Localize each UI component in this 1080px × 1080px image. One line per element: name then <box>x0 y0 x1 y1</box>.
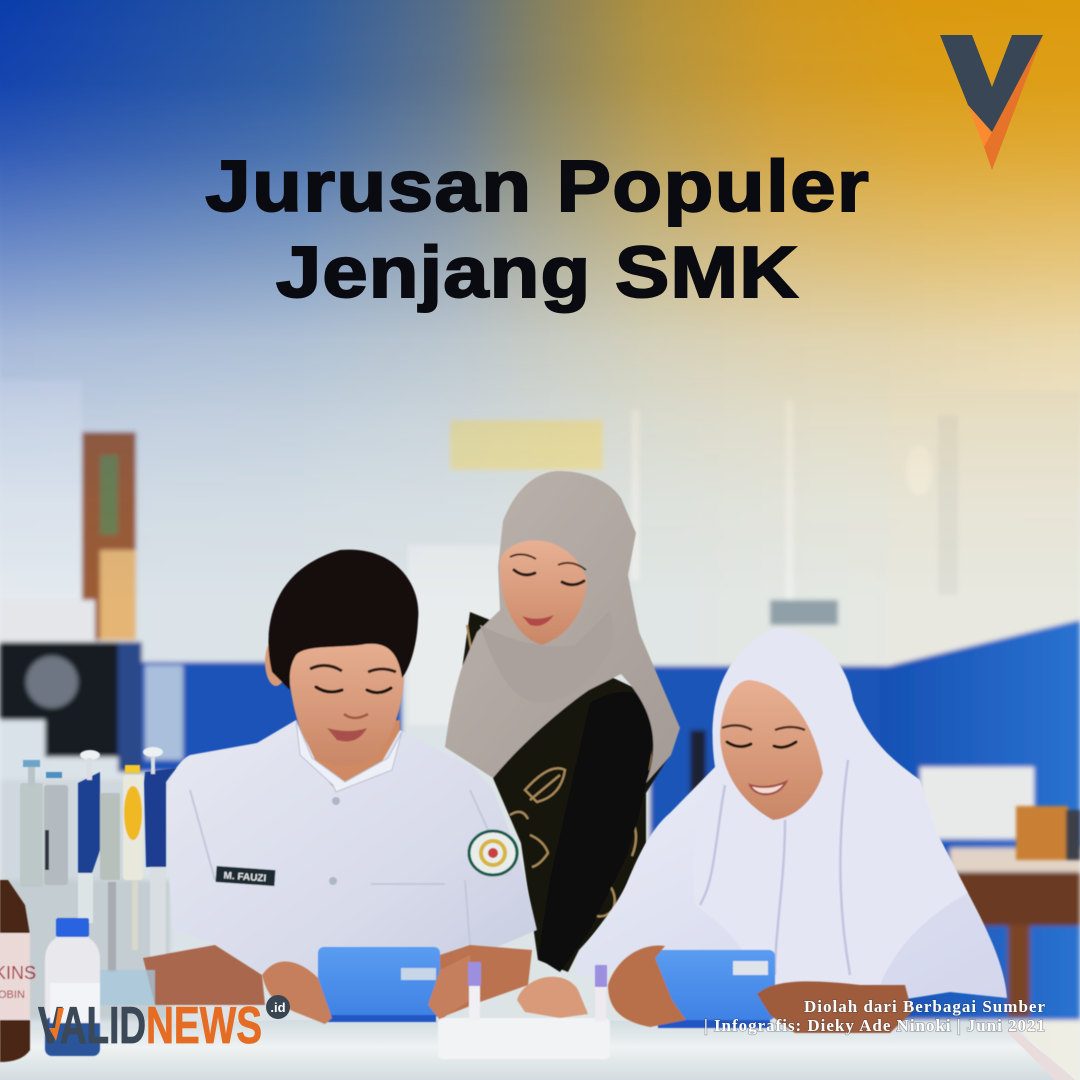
brown forearm behind rack <box>143 945 265 1005</box>
name tag: M. FAUZI <box>223 871 267 884</box>
school badge <box>469 831 517 875</box>
female student right hand <box>757 981 912 1033</box>
girl eyes <box>727 742 796 747</box>
top gradient overlay <box>0 0 1080 538</box>
teacher with grey hijab <box>445 471 680 972</box>
blue tablets, hands and test tubes <box>262 945 912 1059</box>
white test tube rack <box>438 1018 610 1059</box>
source credit: Diolah dari Berbagai Sumber <box>804 997 1045 1016</box>
logo .id badge <box>266 995 290 1019</box>
bottle label <box>0 933 36 1020</box>
source credit <box>704 997 1045 1035</box>
white reagent bottle <box>45 918 100 1056</box>
girl face <box>720 680 823 820</box>
orange box on desk <box>1016 806 1080 860</box>
male student left hand <box>262 962 332 1024</box>
source credit: | Infografis: Dieky Ade Ninoki | Juni 2021 <box>704 1016 1045 1035</box>
teacher eyes <box>514 570 584 585</box>
title <box>205 146 869 313</box>
name tag <box>216 866 275 886</box>
title: Jenjang SMK <box>276 232 798 313</box>
teacher mouth <box>522 615 554 626</box>
title: Jurusan Populer <box>205 146 869 227</box>
student face <box>288 635 404 766</box>
female student blue tablet <box>653 950 775 1028</box>
left bench glassware and pipette rack <box>0 747 265 1062</box>
pipette: blue <box>78 750 100 923</box>
girl brows <box>722 725 805 730</box>
hijab folds <box>700 760 850 975</box>
male student blue tablet <box>318 947 440 1022</box>
shirt folds <box>190 790 497 945</box>
girl smile <box>750 782 786 794</box>
student eyes <box>316 687 391 693</box>
pipette: yellow <box>123 765 143 950</box>
teacher brows <box>510 554 586 570</box>
brown reagent bottle <box>0 880 30 1062</box>
test tube left <box>468 962 481 1020</box>
pipette: navy <box>143 747 176 970</box>
Validnews logo: NEWS <box>146 997 262 1055</box>
teacher dress gold pattern <box>467 625 651 916</box>
student robe and sleeves <box>575 767 1007 1000</box>
teacher black sleeve <box>538 692 657 972</box>
teacher face <box>500 540 587 645</box>
water in tray <box>100 970 155 1005</box>
V logo top right <box>940 35 1043 170</box>
student nose <box>344 714 368 718</box>
male student right hand <box>428 955 470 1020</box>
pipette: grey with label <box>44 772 68 885</box>
shirt buttons <box>329 797 340 885</box>
teacher hand <box>517 977 588 1018</box>
pipette: silver <box>100 793 120 972</box>
hijab under-chin fold <box>480 610 614 703</box>
shirt collar <box>296 720 402 792</box>
student white shirt <box>166 720 537 990</box>
teacher hijab <box>445 471 680 783</box>
pipette: grey <box>20 760 43 887</box>
Validnews logo: VALID <box>38 997 146 1055</box>
student ear <box>265 638 287 686</box>
white hijab <box>694 628 968 985</box>
student smile <box>327 728 367 742</box>
female student with white hijab <box>575 628 1007 1000</box>
Validnews logo <box>38 995 290 1055</box>
teacher batik dress <box>462 612 672 972</box>
female student left hand <box>608 946 686 1027</box>
table surface <box>0 1020 1075 1080</box>
logo .id badge: .id <box>270 1000 286 1015</box>
male student right forearm <box>427 945 532 1018</box>
test tube right <box>595 965 607 1021</box>
male student <box>166 550 537 990</box>
student brows <box>310 665 396 672</box>
student neck <box>302 720 400 795</box>
logo orange check <box>49 1008 64 1041</box>
student hair <box>268 550 418 690</box>
